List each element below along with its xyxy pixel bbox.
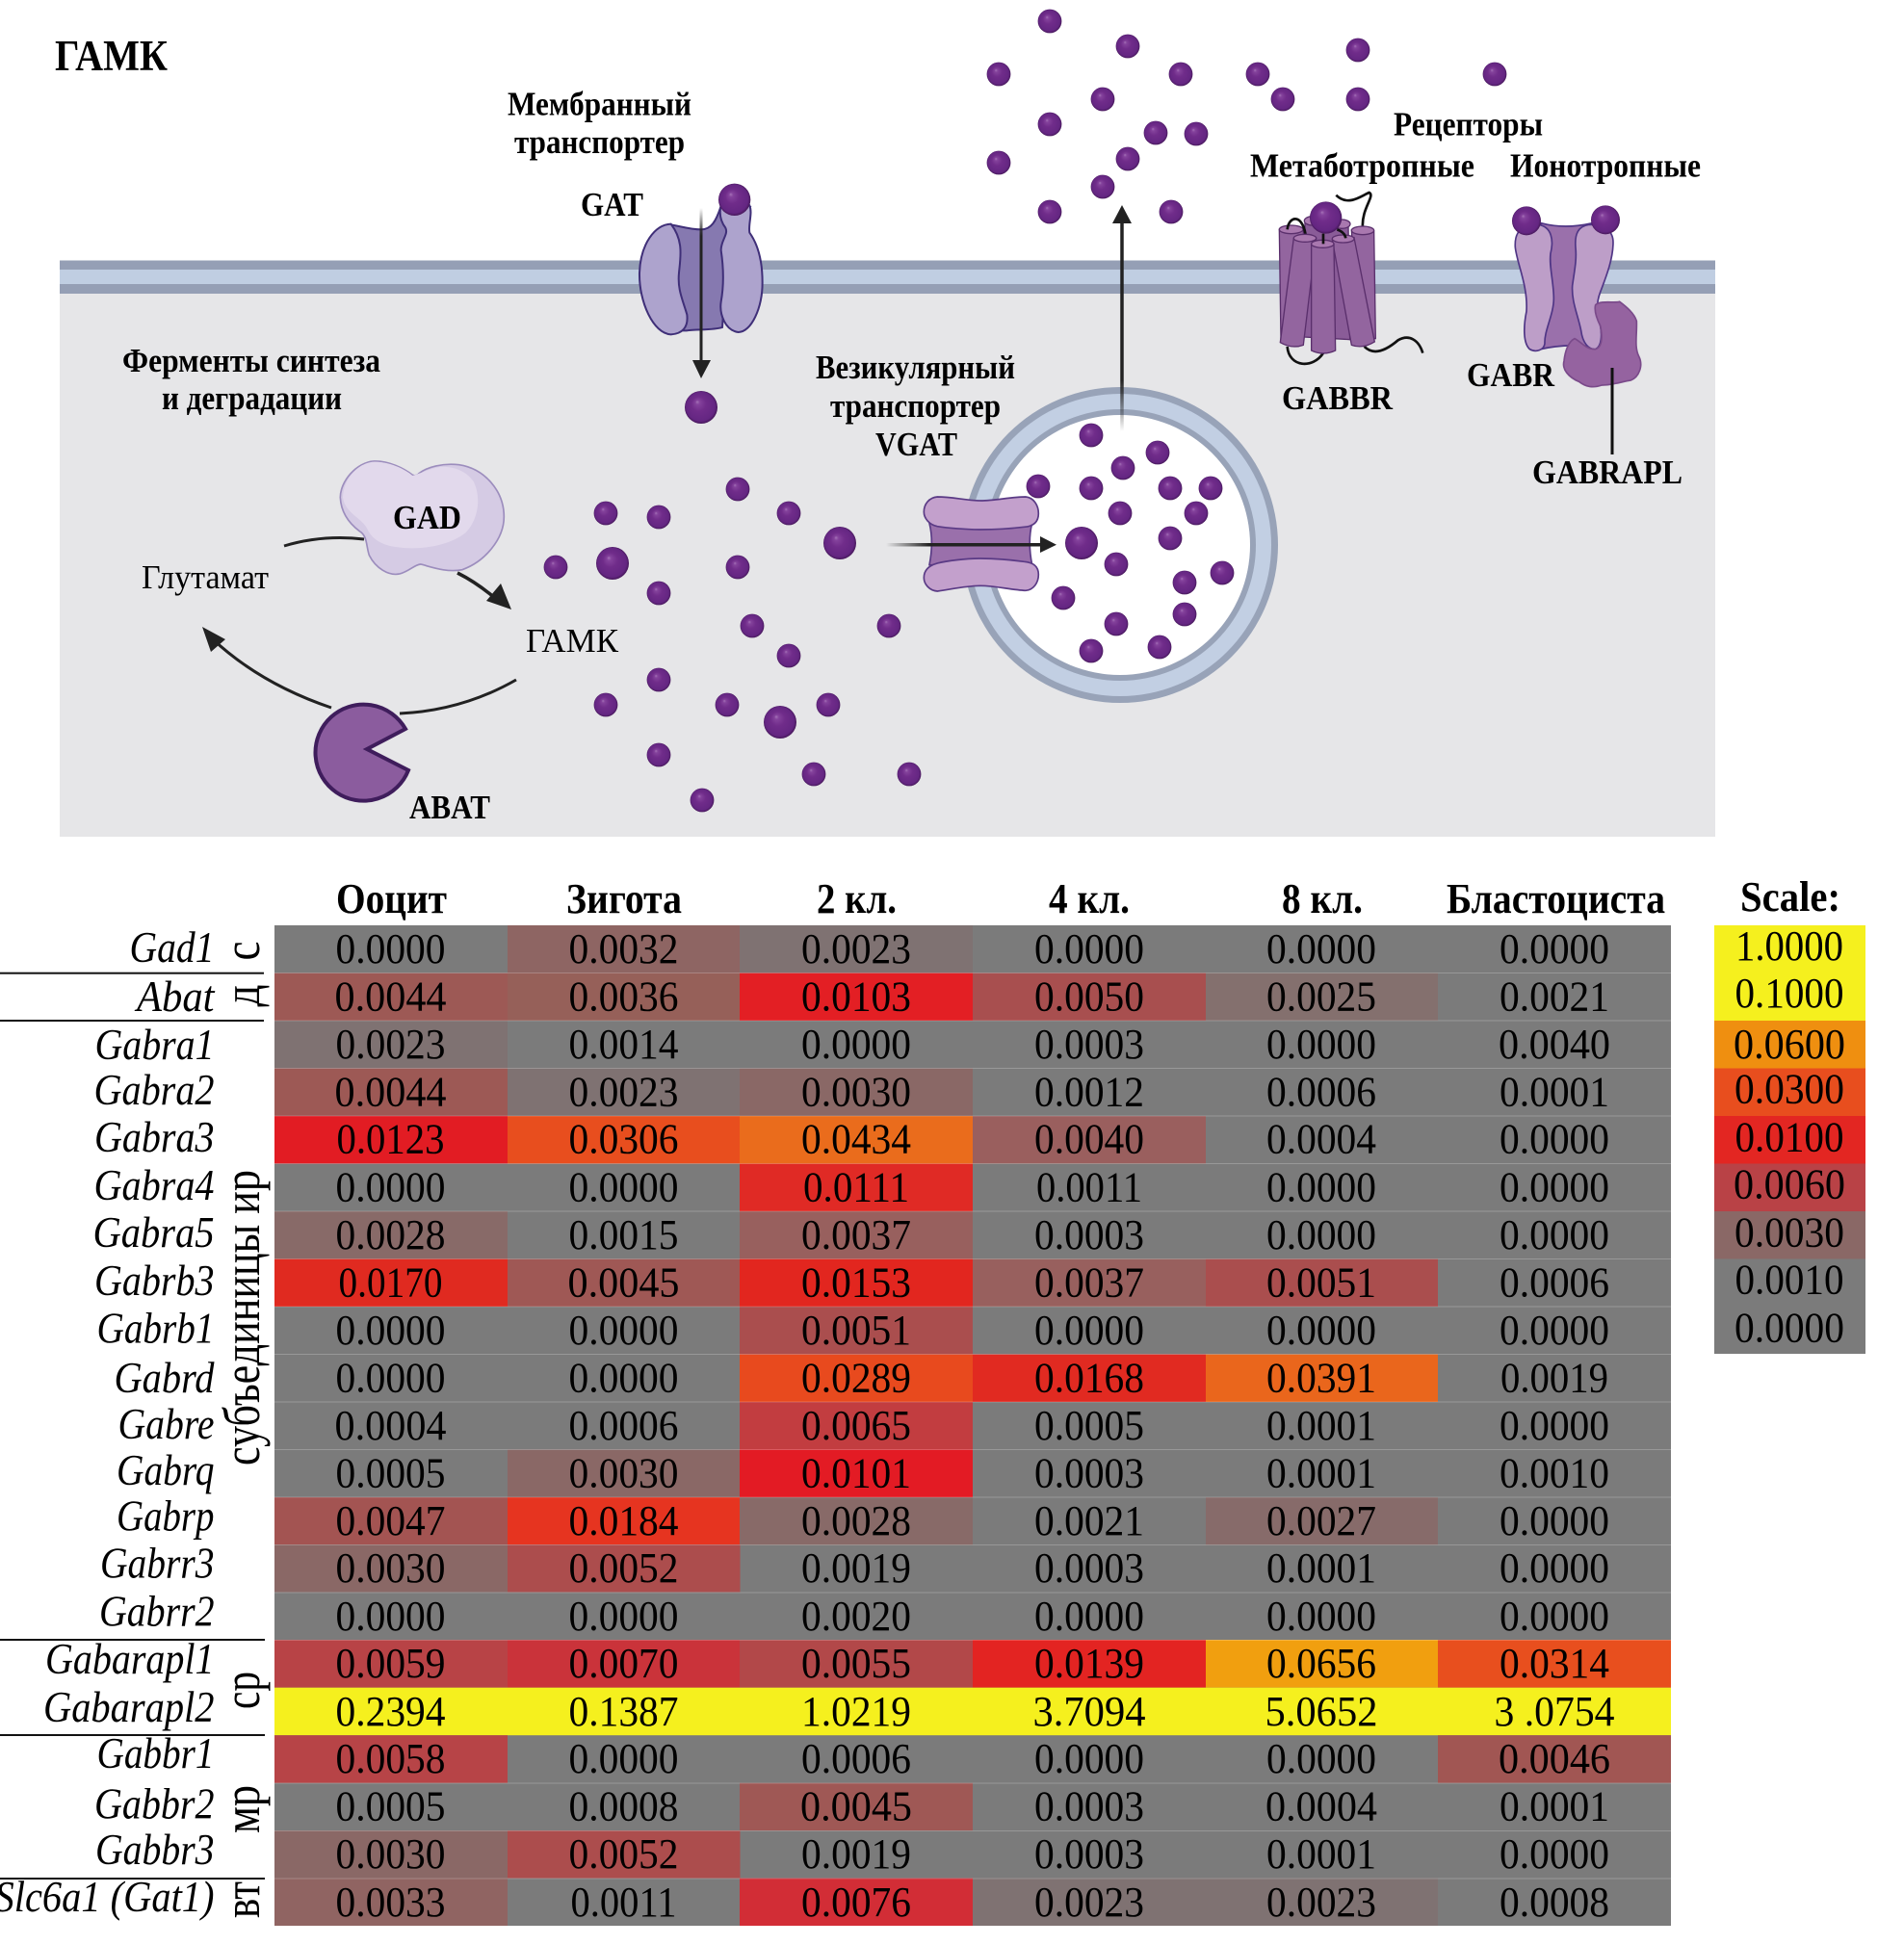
- row: Gabbr2: 0.0045: [800, 1783, 912, 1829]
- column headers: 8 кл.: [1282, 875, 1363, 922]
- row: Gabra4: 0.0000: [1500, 1163, 1609, 1211]
- scale legend: 0.0000: [1734, 1304, 1844, 1352]
- row: Gabrr3: 0.0000: [1500, 1544, 1609, 1592]
- row: Gad1: 0.0032: [568, 925, 678, 972]
- row: Gabbr3: 0.0019: [801, 1830, 911, 1878]
- row: Gabra4: 0.0000: [335, 1163, 445, 1211]
- row: Gabbr1: 0.0000: [1266, 1735, 1376, 1782]
- row labels: gene names: Gabra2: [94, 1066, 214, 1114]
- row: Gabrb1: 0.0000: [1266, 1307, 1376, 1354]
- row labels: gene names: Gabarapl2: [43, 1683, 214, 1731]
- label: enzymes: Ферменты синтеза: [122, 342, 380, 379]
- row labels: gene names: Slc6a1 (Gat1): [0, 1873, 214, 1921]
- group labels: vertical: субъединицы ир: [213, 1170, 271, 1465]
- row: Gabarapl2: 0.1387: [568, 1688, 678, 1735]
- icon: vesicle: [962, 387, 1278, 703]
- row: Gabarapl2: 0.2394: [335, 1688, 445, 1735]
- row: Gabra5: 0.0003: [1034, 1211, 1144, 1258]
- row: Gabra1: 0.0000: [801, 1021, 911, 1068]
- row: Gabrb1: 0.0000: [568, 1307, 678, 1354]
- icon: GABBR metabotropic receptor: [1279, 193, 1422, 364]
- row: Gabrb3: 0.0037: [1034, 1259, 1144, 1306]
- icon: GABRAPL protein: [1564, 301, 1641, 454]
- column headers: Ооцит: [336, 875, 447, 922]
- row: Gabra1: 0.0023: [335, 1021, 445, 1068]
- label: vesicular transporter VGAT: [816, 349, 1015, 463]
- title: ГАМК: [55, 32, 168, 80]
- arrow: GABA to ABAT: [400, 680, 516, 713]
- row: Gabrb1: 0.0000: [1500, 1307, 1609, 1354]
- label: GAD: GAD: [393, 499, 461, 536]
- row: Gabra3: 0.0040: [1034, 1115, 1144, 1163]
- row: Gabbr2: [335, 1783, 1609, 1830]
- row: Gabra2: 0.0030: [801, 1069, 911, 1115]
- label: GABBR: GABBR: [1282, 379, 1394, 417]
- icon: GAD enzyme: [340, 461, 504, 574]
- row: Gabbr3: [274, 1830, 1609, 1879]
- icon: GAT transporter: [639, 184, 763, 334]
- row: Gabarapl1: 0.0314: [1500, 1640, 1609, 1687]
- row: Gabbr2: 0.0005: [335, 1783, 445, 1829]
- row: Slc6a1: 0.0023: [1266, 1879, 1376, 1926]
- row: Gabrb3: 0.0045: [568, 1259, 680, 1306]
- row: Gabarapl2: 1.0219: [801, 1688, 911, 1735]
- row labels: gene names: Gabra1: [94, 1021, 214, 1069]
- row: Gabra5: [274, 1211, 1609, 1259]
- row labels: gene names: Gabra4: [94, 1161, 214, 1209]
- row: Gad1: 0.0000: [335, 925, 445, 972]
- row: Gad1: 0.0000: [1266, 925, 1376, 972]
- row: Gabra4: 0.0000: [1266, 1163, 1376, 1211]
- row: Abat: [274, 972, 1609, 1021]
- row: Gabra1: 0.0040: [1499, 1021, 1610, 1068]
- row: Gabrp: 0.0021: [1034, 1497, 1144, 1544]
- label: ABAT: ABAT: [409, 789, 490, 826]
- row: Abat: 0.0103: [801, 972, 911, 1021]
- group labels: vertical: с: [213, 942, 271, 961]
- row: Gabre: 0.0005: [1034, 1402, 1144, 1449]
- row: Abat: 0.0021: [1500, 972, 1609, 1021]
- group labels: vertical: вт: [213, 1881, 271, 1918]
- row: Gabbr1: 0.0000: [568, 1735, 678, 1782]
- row: Gad1: [335, 925, 1609, 972]
- scale legend: 0.0060: [1734, 1161, 1845, 1207]
- row labels: gene names: Gabrr2: [99, 1587, 214, 1635]
- row: Gabrp: 0.0027: [1266, 1497, 1376, 1544]
- row: Gabrd: 0.0000: [335, 1354, 445, 1402]
- row: Gabra2: 0.0001: [1500, 1069, 1609, 1115]
- row: Gabra5: 0.0037: [801, 1211, 911, 1258]
- row labels: gene names: Gabbr1: [96, 1729, 214, 1777]
- scale legend: [1714, 922, 1865, 1354]
- row labels: gene names: Gabra3: [94, 1113, 214, 1161]
- scale heading: Scale:: [1740, 873, 1840, 921]
- row: Gabrq: 0.0030: [568, 1450, 678, 1496]
- group dividers: [0, 972, 265, 1880]
- row labels: gene names: Gabrq: [117, 1446, 214, 1494]
- row labels: gene names: Abat: [134, 972, 216, 1021]
- row: Gabra3: 0.0000: [1500, 1115, 1609, 1163]
- label: enzymes: и деградации: [162, 379, 342, 417]
- row: Gabra3: 0.0123: [337, 1115, 445, 1163]
- label: vesicular transporter VGAT: VGAT: [875, 426, 957, 463]
- row: Gabre: [335, 1402, 1609, 1450]
- heatmap table: [274, 925, 1671, 1926]
- label: glutamate: Глутамат: [142, 558, 269, 596]
- column headers: Бластоциста: [1447, 875, 1665, 922]
- row: Gabrr2: 0.0000: [335, 1593, 445, 1640]
- scale legend: 0.1000: [1735, 970, 1843, 1017]
- column headers: Зигота: [566, 875, 682, 922]
- row labels: gene names: Gabre: [117, 1400, 214, 1448]
- panel: cytoplasm: [60, 289, 1715, 837]
- row: Gabra4: [335, 1163, 1609, 1211]
- row: Gabrb1: [335, 1307, 1609, 1354]
- row: Gabbr2: 0.0008: [568, 1783, 678, 1829]
- row: Gabra5: 0.0000: [1266, 1211, 1376, 1258]
- row: Gabrr3: [274, 1544, 1609, 1593]
- row: Slc6a1: 0.0033: [335, 1879, 445, 1926]
- row: Gabbr1: 0.0006: [801, 1735, 911, 1782]
- arrow: glutamate to GAD: [284, 538, 364, 546]
- row: Gabbr3: 0.0003: [1034, 1830, 1144, 1878]
- row: Gabrq: [335, 1450, 1609, 1497]
- label: membrane transporter: [508, 85, 691, 161]
- row: Gabra4: 0.0011: [1036, 1163, 1142, 1211]
- row: Gabra2: 0.0023: [568, 1069, 678, 1115]
- row: Gabrb3: [274, 1259, 1609, 1307]
- group labels: vertical: д: [213, 984, 271, 1007]
- arrow: GAT into cell: [692, 208, 711, 378]
- row: Gabrq: 0.0001: [1266, 1450, 1376, 1496]
- row: Gabrb3: 0.0006: [1500, 1259, 1609, 1306]
- row: Gabrd: 0.0289: [801, 1354, 911, 1402]
- row: Gabrb3: 0.0170: [339, 1259, 443, 1306]
- row: Gabarapl1: 0.0059: [335, 1640, 445, 1687]
- row: Gabarapl1: 0.0070: [568, 1640, 678, 1687]
- row: Gabre: 0.0065: [801, 1402, 911, 1449]
- row: Gabrb1: 0.0000: [1034, 1307, 1144, 1354]
- row labels: gene names: Gabrp: [117, 1492, 214, 1541]
- row: Gabarapl2: 3 .0754: [1495, 1688, 1614, 1735]
- row labels: gene names: Gabbr2: [94, 1779, 214, 1828]
- label: receptors: Метаботропные: [1250, 146, 1474, 185]
- scale legend: 0.0010: [1735, 1256, 1843, 1304]
- row: Gabra2: 0.0012: [1034, 1069, 1144, 1115]
- label: GABR: GABR: [1467, 356, 1555, 394]
- scale legend: 0.0300: [1734, 1065, 1844, 1113]
- row labels: gene names: Gabrr3: [100, 1539, 214, 1587]
- scale legend: 0.0100: [1735, 1113, 1843, 1161]
- row: Gabrr3: 0.0001: [1266, 1544, 1376, 1592]
- row: Gabrr3: 0.0019: [801, 1544, 911, 1592]
- row: Gad1: 0.0023: [801, 925, 911, 972]
- row: Gabra3: 0.0434: [801, 1115, 911, 1163]
- row: Gabrr2: 0.0000: [1500, 1593, 1609, 1640]
- row: Slc6a1: [274, 1879, 1609, 1926]
- row: Gabre: 0.0004: [335, 1402, 447, 1449]
- row: Gad1: 0.0000: [1500, 925, 1609, 972]
- row: Gabarapl2: 3.7094: [1032, 1688, 1146, 1735]
- row: Gabrr2: 0.0020: [801, 1593, 911, 1640]
- row labels: gene names: Gabbr3: [95, 1826, 214, 1874]
- row labels: gene names: [0, 923, 216, 1921]
- row: Gabarapl1: [274, 1640, 1671, 1688]
- row: Slc6a1: 0.0011: [570, 1879, 676, 1926]
- row: Gabbr1: 0.0058: [335, 1735, 445, 1782]
- row: Gabra4: 0.0111: [803, 1163, 909, 1211]
- row: Gabbr1: 0.0000: [1034, 1735, 1144, 1782]
- row: Gabra3: 0.0306: [568, 1115, 678, 1163]
- row: Gabre: 0.0000: [1500, 1402, 1609, 1449]
- label: receptors: [1250, 106, 1701, 185]
- row: Gabrr2: 0.0000: [568, 1593, 678, 1640]
- row: Gabra1: 0.0000: [1266, 1021, 1376, 1068]
- label: GABA: ГАМК: [526, 622, 619, 660]
- row: Gabra5: 0.0000: [1500, 1211, 1609, 1258]
- label: receptors: Рецепторы: [1394, 106, 1543, 143]
- row: Gabrq: 0.0005: [335, 1450, 445, 1496]
- row: Gabbr1: 0.0046: [1499, 1735, 1610, 1782]
- row: Gabbr1: [274, 1735, 1671, 1783]
- row: Gabra1: 0.0014: [568, 1021, 678, 1068]
- row: Gabbr3: 0.0052: [568, 1830, 678, 1878]
- row: Slc6a1: 0.0076: [801, 1879, 911, 1926]
- arrow: GAD to GABA: [457, 573, 511, 609]
- scale legend: 0.0600: [1734, 1021, 1845, 1068]
- row: Gabra2: 0.0044: [335, 1069, 447, 1115]
- row: Gabbr2: 0.0003: [1034, 1783, 1144, 1829]
- row: Gabarapl2: 5.0652: [1265, 1688, 1377, 1735]
- group labels: vertical: ср: [213, 1672, 271, 1709]
- row: Gabrd: 0.0391: [1266, 1354, 1376, 1402]
- row: Gabrp: 0.0047: [335, 1497, 445, 1544]
- label: vesicular transporter VGAT: транспортер: [830, 387, 1001, 425]
- row labels: gene names: Gabrd: [114, 1354, 215, 1402]
- row: Gabbr3: 0.0030: [335, 1830, 445, 1878]
- row: Gabrd: [335, 1354, 1608, 1402]
- label: enzymes: [122, 342, 380, 417]
- icon: VGAT transporter: [924, 497, 1038, 591]
- particles: cytoplasmic GABA: [544, 391, 921, 812]
- label: GAT: GAT: [581, 186, 643, 223]
- row: Gabre: 0.0001: [1266, 1402, 1376, 1449]
- row: Gabrp: 0.0184: [568, 1497, 678, 1544]
- particles: extracellular GABA: [987, 10, 1506, 223]
- row: Gabrr3: 0.0052: [568, 1544, 678, 1592]
- arrow: vesicle release: [1112, 205, 1132, 431]
- label: membrane transporter: транспортер: [514, 123, 685, 161]
- row: Gabrr3: 0.0003: [1034, 1544, 1144, 1592]
- icon: ABAT enzyme: [315, 705, 408, 801]
- row: Gabra4: 0.0000: [568, 1163, 678, 1211]
- row: Gabrr2: 0.0000: [1266, 1593, 1376, 1640]
- row: Gabbr3: 0.0000: [1500, 1830, 1609, 1878]
- row: Gabrb3: 0.0153: [801, 1259, 911, 1306]
- row: Gabbr2: 0.0004: [1265, 1783, 1377, 1829]
- row: Gabrd: 0.0168: [1034, 1354, 1144, 1402]
- row: Gabra3: 0.0004: [1266, 1115, 1376, 1163]
- scale legend: 0.0030: [1734, 1209, 1844, 1256]
- membrane: [60, 260, 1715, 294]
- row: Abat: 0.0036: [568, 972, 678, 1021]
- column headers: 4 кл.: [1049, 875, 1130, 922]
- label: GABRAPL: GABRAPL: [1532, 454, 1682, 491]
- row: Gabrd: 0.0019: [1500, 1354, 1608, 1402]
- row: Gabrp: 0.0028: [801, 1497, 911, 1544]
- row: Gabrr3: 0.0030: [335, 1544, 445, 1592]
- row: Gabra2: [274, 1069, 1609, 1116]
- row: Gabrq: 0.0003: [1034, 1450, 1144, 1496]
- row: Gabbr3: 0.0001: [1266, 1830, 1376, 1878]
- label: receptors: Ионотропные: [1510, 146, 1701, 185]
- label: vesicular transporter VGAT: Везикулярный: [816, 349, 1015, 386]
- row: Gabrr2: 0.0000: [1034, 1593, 1144, 1640]
- scale legend: 1.0000: [1735, 922, 1843, 970]
- row: Gabrb3: 0.0051: [1266, 1259, 1376, 1306]
- row: Gabarapl2: [274, 1688, 1671, 1735]
- label: membrane transporter: Мембранный: [508, 85, 691, 123]
- group labels: vertical: мр: [213, 1785, 271, 1833]
- row labels: gene names: Gad1: [129, 923, 214, 972]
- row: Gabbr2: 0.0001: [1500, 1783, 1609, 1829]
- row: Gabrb1: 0.0051: [801, 1307, 911, 1354]
- row: Gabra1: 0.0003: [1034, 1021, 1144, 1068]
- row: Gabrq: 0.0101: [801, 1450, 911, 1496]
- row: Abat: 0.0044: [335, 972, 447, 1021]
- row: Gabrb1: 0.0000: [335, 1307, 445, 1354]
- group labels: vertical: [213, 942, 271, 1918]
- row: Gabre: 0.0006: [568, 1402, 678, 1449]
- row: Gad1: 0.0000: [1034, 925, 1144, 972]
- row: Gabra3: [274, 1115, 1609, 1163]
- icon: GABR ionotropic receptor: [1512, 205, 1620, 350]
- row: Gabrq: 0.0010: [1500, 1450, 1609, 1496]
- row: Gabrd: 0.0000: [568, 1354, 678, 1402]
- row: Gabarapl1: 0.0656: [1266, 1640, 1376, 1687]
- row labels: gene names: Gabrb1: [96, 1304, 214, 1352]
- arrow: ABAT to glutamate: [202, 627, 331, 708]
- row: Gabrp: [274, 1497, 1609, 1544]
- row: Gabrr2: [335, 1593, 1609, 1640]
- row: Gabra5: 0.0015: [568, 1211, 678, 1258]
- row: Gabra2: 0.0006: [1266, 1069, 1376, 1115]
- row: Gabra1: [274, 1021, 1610, 1069]
- row: Gabarapl1: 0.0139: [1034, 1640, 1144, 1687]
- row: Gabrp: 0.0000: [1500, 1497, 1609, 1544]
- row: Gabarapl1: 0.0055: [801, 1640, 911, 1687]
- row: Slc6a1: 0.0008: [1500, 1879, 1609, 1926]
- row: Slc6a1: 0.0023: [1034, 1879, 1144, 1926]
- row: Abat: 0.0050: [1034, 972, 1144, 1021]
- column headers: [336, 875, 1665, 922]
- row: Gabra5: 0.0028: [335, 1211, 445, 1258]
- row labels: gene names: Gabra5: [92, 1208, 214, 1257]
- row labels: gene names: Gabrb3: [94, 1257, 214, 1305]
- row: Abat: 0.0025: [1266, 972, 1376, 1021]
- arrow: into vesicle: [886, 536, 1056, 553]
- column headers: 2 кл.: [817, 875, 897, 922]
- row labels: gene names: Gabarapl1: [45, 1635, 214, 1683]
